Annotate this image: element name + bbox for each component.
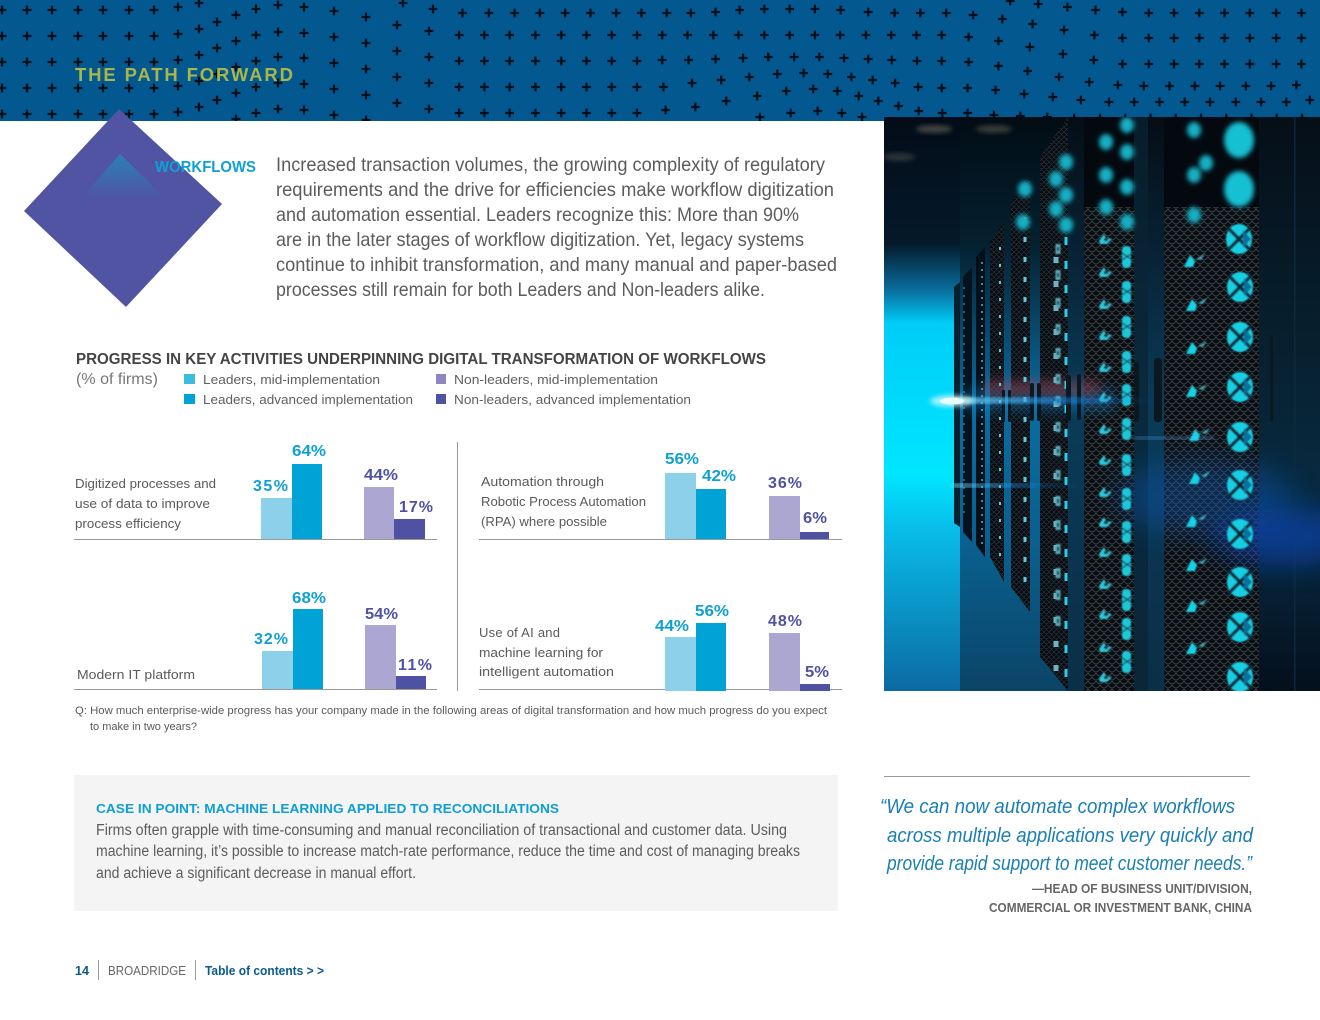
chart: modern IT platform: 54% <box>365 606 398 623</box>
chart: robotic process automation: (RPA) where possible <box>481 514 607 529</box>
chart: robotic process automation: 56% <box>665 451 699 468</box>
chart: AI and machine learning: 44% <box>655 618 689 635</box>
footer: BROADRIDGE <box>108 964 186 978</box>
chart: digitized processes: 44% <box>364 467 398 484</box>
legend <box>184 372 691 407</box>
intro paragraph: are in the later stages of workflow digitization. Yet, legacy systems <box>276 229 804 251</box>
icon: workflows diamond <box>24 109 222 307</box>
section title: the path forward: THE PATH FORWARD <box>75 64 293 85</box>
chart: modern IT platform <box>74 590 437 690</box>
footer: Table of contents > > <box>205 964 324 978</box>
legend: Non-leaders, mid-implementation <box>454 372 658 387</box>
legend: Leaders, mid-implementation <box>203 372 380 387</box>
chart unit note: (% of firms) <box>76 371 158 388</box>
legend: Leaders, advanced implementation <box>203 392 413 407</box>
survey question note: Q: How much enterprise-wide progress has your company made in the following areas of digital transformation and how much progress do you expect <box>75 705 827 717</box>
chart: digitized processes: Digitized processes and <box>75 476 216 491</box>
chart: digitized processes: process efficiency <box>75 516 182 531</box>
chart heading: PROGRESS IN KEY ACTIVITIES UNDERPINNING DIGITAL TRANSFORMATION OF WORKFLOWS <box>76 351 766 368</box>
survey question note <box>75 705 827 733</box>
panel: case in point: and achieve a significant decrease in manual effort. <box>96 865 416 882</box>
pull quote: COMMERCIAL OR INVESTMENT BANK, CHINA <box>989 900 1253 915</box>
photo: data center server racks <box>883 117 1320 691</box>
chart: robotic process automation: 36% <box>768 475 802 492</box>
chart: AI and machine learning: 48% <box>768 613 802 630</box>
chart: AI and machine learning: Use of AI and <box>479 625 560 640</box>
chart: modern IT platform: 32% <box>254 631 288 648</box>
chart: modern IT platform: 11% <box>398 657 432 674</box>
panel: case in point: CASE IN POINT: MACHINE LEARNING APPLIED TO RECONCILIATIONS <box>96 801 559 816</box>
chart: AI and machine learning: 56% <box>695 603 729 620</box>
chart: robotic process automation: Automation through <box>481 474 604 489</box>
pull quote: —HEAD OF BUSINESS UNIT/DIVISION, <box>1032 881 1252 896</box>
panel: case in point: machine learning, it’s possible to increase match-rate performance, reduce the time and cost of managing breaks <box>96 843 800 860</box>
intro paragraph: Increased transaction volumes, the growing complexity of regulatory <box>276 154 825 176</box>
legend: Non-leaders, advanced implementation <box>454 392 691 407</box>
footer: 14 <box>75 963 90 978</box>
chart: modern IT platform: Modern IT platform <box>77 667 195 682</box>
chart: robotic process automation: 6% <box>803 510 827 527</box>
chart: digitized processes <box>74 443 437 540</box>
chart: digitized processes: 35% <box>253 478 288 495</box>
chart: digitized processes: 17% <box>399 499 433 516</box>
pull quote: across multiple applications very quickly and <box>887 824 1254 847</box>
intro paragraph <box>276 154 837 301</box>
chart: AI and machine learning <box>479 603 842 691</box>
intro paragraph: and automation essential. Leaders recognize this: More than 90% <box>276 204 799 226</box>
intro paragraph: processes still remain for both Leaders and Non-leaders alike. <box>276 279 765 301</box>
chart: digitized processes: 64% <box>292 443 326 460</box>
survey question note: to make in two years? <box>90 721 197 733</box>
pull quote: provide rapid support to meet customer needs.” <box>886 852 1253 875</box>
chart: robotic process automation: Robotic Process Automation <box>481 494 646 509</box>
intro paragraph: requirements and the drive for efficiencies make workflow digitization <box>276 179 834 201</box>
pull quote <box>880 776 1254 915</box>
chart: digitized processes: use of data to improve <box>75 496 210 511</box>
intro paragraph: continue to inhibit transformation, and many manual and paper-based <box>276 254 837 276</box>
chart: AI and machine learning: intelligent automation <box>479 664 614 679</box>
workflows label: WORKFLOWS <box>155 159 256 176</box>
pull quote: “We can now automate complex workflows <box>880 795 1235 818</box>
chart: robotic process automation <box>479 451 842 540</box>
chart: robotic process automation: 42% <box>702 468 736 485</box>
panel: case in point <box>74 775 838 911</box>
panel: case in point: Firms often grapple with time-consuming and manual reconciliation of transactional and customer data. Using <box>96 822 787 839</box>
chart: AI and machine learning: 5% <box>805 664 829 681</box>
header band <box>0 0 1320 121</box>
chart: AI and machine learning: machine learning for <box>479 645 604 660</box>
footer <box>75 960 324 980</box>
chart: modern IT platform: 68% <box>292 590 326 607</box>
